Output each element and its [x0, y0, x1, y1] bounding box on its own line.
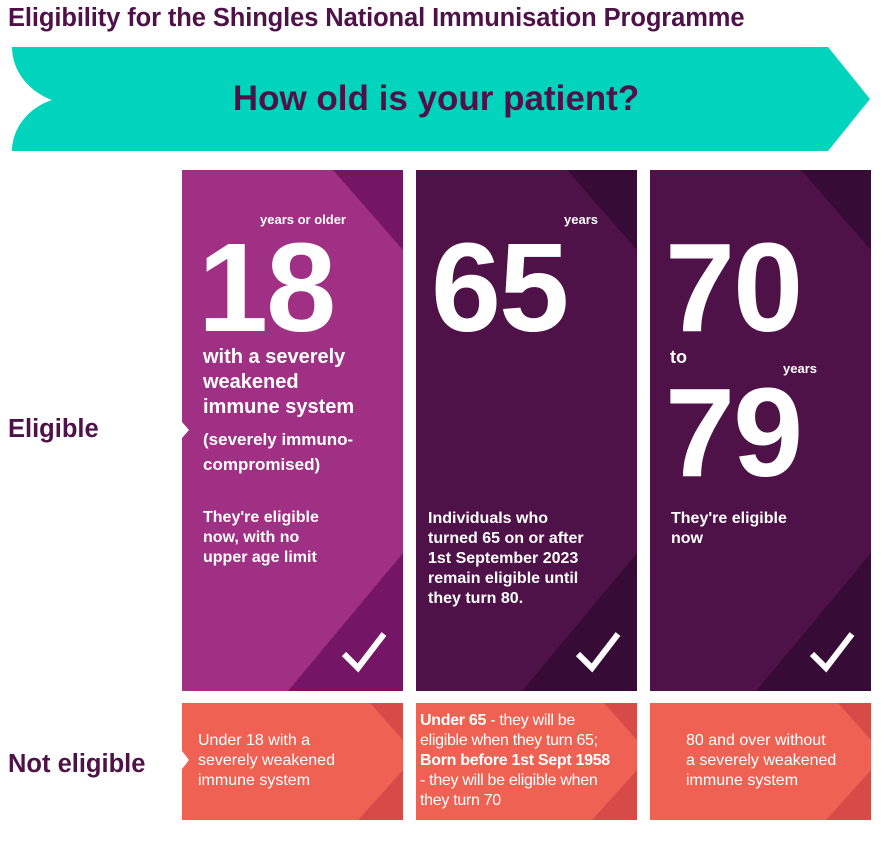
card: 18 years or older: now, with no	[203, 529, 299, 546]
not eligible: 80 and over: 80 and over without	[686, 732, 826, 749]
card: 70 to 79 years: to	[670, 347, 687, 367]
card: 70 to 79 years: 70	[665, 217, 801, 358]
icon: tick	[342, 632, 386, 672]
card: 18 years or older: 18	[198, 217, 334, 358]
icon: tick	[810, 632, 854, 672]
card: 18 years or older: upper age limit	[203, 549, 317, 566]
card: 65 years: turned 65 on or after	[428, 530, 584, 547]
card: 18 years or older: with a severely	[203, 346, 345, 368]
not eligible: under 18: severely weakened	[198, 752, 335, 769]
card: 18 years or older: weakened	[203, 371, 299, 393]
card: 65 years: they turn 80.	[428, 590, 523, 607]
card: 18 years or older: years or older	[260, 212, 346, 227]
not eligible: under 18	[182, 703, 403, 820]
banner: how old is your patient: How old is your patient?	[233, 79, 639, 118]
not eligible: under 65 / born before 1958	[416, 703, 637, 820]
not eligible: 80 and over: immune system	[686, 772, 798, 789]
card: 18 years or older: They're eligible	[203, 509, 319, 526]
not eligible: under 65 / born before 1958: Born before 1st Sept 1958	[420, 752, 610, 769]
card: 65 years: Individuals who	[428, 510, 548, 527]
card: 70 to 79 years: years	[783, 361, 817, 376]
not eligible: under 18: Under 18 with a	[198, 732, 310, 749]
card: 70 to 79 years: now	[671, 530, 703, 547]
label: Eligible: Eligible	[8, 415, 99, 443]
title: Eligibility for the Shingles National Immunisation Programme	[8, 4, 744, 32]
not eligible: under 65 / born before 1958: they turn 70	[420, 792, 501, 809]
not eligible: under 65 / born before 1958: Under 65 - they will be	[420, 712, 575, 729]
card: 70 to 79 years	[650, 170, 871, 691]
banner: how old is your patient	[12, 47, 870, 151]
card: 70 to 79 years: They're eligible	[671, 510, 787, 527]
card: 18 years or older: compromised)	[203, 455, 320, 474]
card: 18 years or older: (severely immuno-	[203, 430, 353, 449]
not eligible: under 65 / born before 1958: - they will be eligible when	[420, 772, 597, 789]
card: 65 years: 1st September 2023	[428, 550, 578, 567]
card: 18 years or older	[182, 170, 403, 691]
not eligible: 80 and over	[650, 703, 871, 820]
not eligible: under 65 / born before 1958: eligible when they turn 65;	[420, 732, 598, 749]
not eligible: 80 and over: a severely weakened	[686, 752, 836, 769]
icon: tick	[576, 632, 620, 672]
card: 65 years: remain eligible until	[428, 570, 578, 587]
card: 65 years: years	[564, 212, 598, 227]
card: 70 to 79 years: 79	[665, 362, 801, 503]
not eligible: under 18: immune system	[198, 772, 310, 789]
card: 18 years or older: immune system	[203, 396, 354, 418]
label: Not eligible: Not eligible	[8, 750, 145, 778]
card: 65 years	[416, 170, 637, 691]
card: 65 years: 65	[431, 217, 567, 358]
